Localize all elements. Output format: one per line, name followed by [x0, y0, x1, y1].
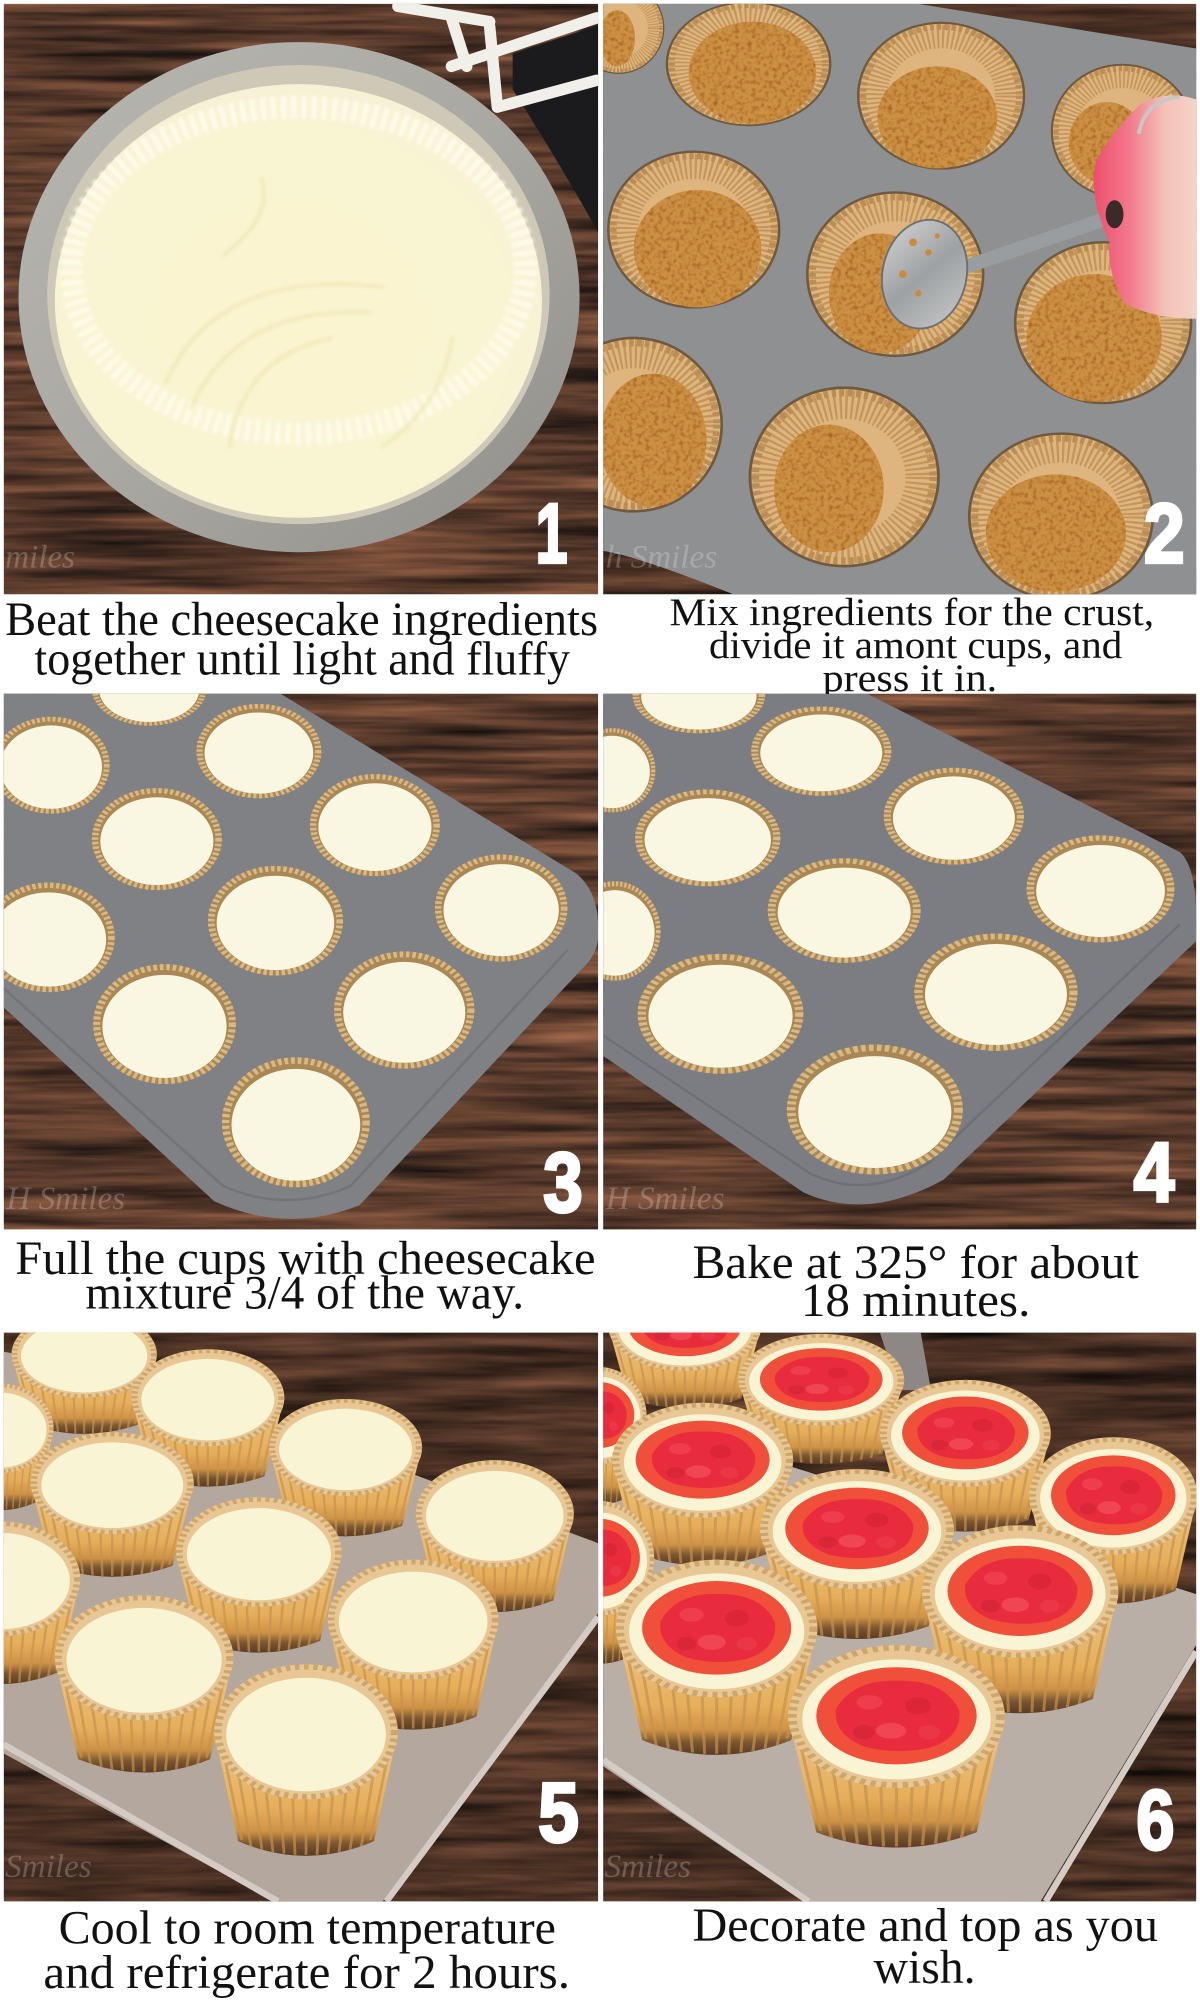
watermark: miles [5, 538, 75, 575]
mixer body [513, 26, 598, 232]
wood tabletop [4, 4, 598, 594]
serving board [603, 1441, 1196, 1901]
muffin pan [603, 4, 1196, 594]
step number 3: 3 [543, 1136, 583, 1230]
pan rim line [603, 925, 1180, 1185]
caption 5 [43, 1903, 570, 1999]
step number 1: 1 [536, 486, 567, 580]
wood tabletop [603, 4, 1196, 594]
graham crumbs [599, 10, 1162, 592]
wood tabletop [4, 1333, 598, 1901]
panel 5: cooled cheesecakes on board [0, 1311, 598, 1901]
serving board [4, 1352, 598, 1901]
step number 2: 2 [1144, 486, 1185, 580]
steel bowl [18, 42, 580, 552]
panel 6: cheesecakes with strawberry topping [545, 1282, 1197, 1901]
glass jar of topping [880, 1333, 931, 1390]
caption 1: together until light and fluffy [34, 634, 570, 686]
panel 4: baked cheesecakes on tin [603, 694, 1196, 1230]
step number 5: 5 [538, 1765, 579, 1859]
measuring spoon handle [963, 217, 1112, 268]
caption 4 [692, 1237, 1139, 1327]
baked cheesecakes [603, 694, 1174, 1174]
caption 6 [692, 1900, 1158, 1994]
caption 5: Cool to room temperature [59, 1903, 556, 1955]
caption 3: mixture 3/4 of the way. [85, 1267, 524, 1319]
crumbs in spoon [899, 233, 940, 296]
cups of batter [0, 652, 567, 1187]
spoon bowl [880, 218, 968, 330]
bowl inner wall [47, 65, 550, 524]
watermark: H Smiles [5, 1180, 125, 1217]
panel 2: crust in muffin tin [603, 4, 1196, 594]
caption 2: press it in. [823, 656, 997, 700]
caption 2 [670, 590, 1154, 700]
panel 1: beating cheesecake mixture in a steel bowl [4, 4, 598, 594]
spoon grip [1106, 200, 1123, 228]
caption 3 [15, 1233, 596, 1319]
mini cheesecakes [0, 1311, 574, 1856]
mixer beaters [398, 6, 597, 107]
watermark: Smiles [604, 1848, 691, 1885]
cheesecake batter [55, 84, 542, 518]
watermark: H Smiles [605, 1180, 724, 1217]
muffin pan [4, 694, 598, 1219]
board edge highlight [603, 1651, 1196, 1901]
caption 3: Full the cups with cheesecake [15, 1233, 596, 1285]
caption 6: wish. [874, 1942, 976, 1994]
mixing swirls [166, 179, 453, 446]
caption 6: Decorate and top as you [692, 1900, 1158, 1952]
caption 4: 18 minutes. [801, 1275, 1030, 1327]
wood tabletop [603, 694, 1196, 1229]
caption 1 [5, 594, 598, 686]
caption 4: Bake at 325° for about [692, 1237, 1139, 1289]
wood tabletop [603, 1333, 1196, 1901]
watermark: h Smiles [606, 538, 717, 575]
caption 1: Beat the cheesecake ingredients [5, 594, 598, 646]
caption 5: and refrigerate for 2 hours. [43, 1947, 570, 1999]
topped mini cheesecakes [545, 1282, 1197, 1848]
board edge highlight [4, 1617, 598, 1901]
ring on finger [1139, 97, 1180, 134]
muffin pan [603, 694, 1196, 1204]
hand [1094, 95, 1196, 319]
caption 2: divide it amont cups, and [709, 623, 1122, 667]
wood tabletop [4, 694, 598, 1229]
pan rim line [4, 950, 567, 1200]
step number 6: 6 [1136, 1773, 1174, 1867]
whipped batter edge [71, 107, 525, 434]
panel 3: filled cups on grey tin [0, 652, 598, 1230]
step number 4: 4 [1134, 1125, 1175, 1219]
watermark: Smiles [5, 1848, 92, 1885]
paper cups [603, 4, 1192, 594]
caption 2: Mix ingredients for the crust, [670, 590, 1154, 634]
